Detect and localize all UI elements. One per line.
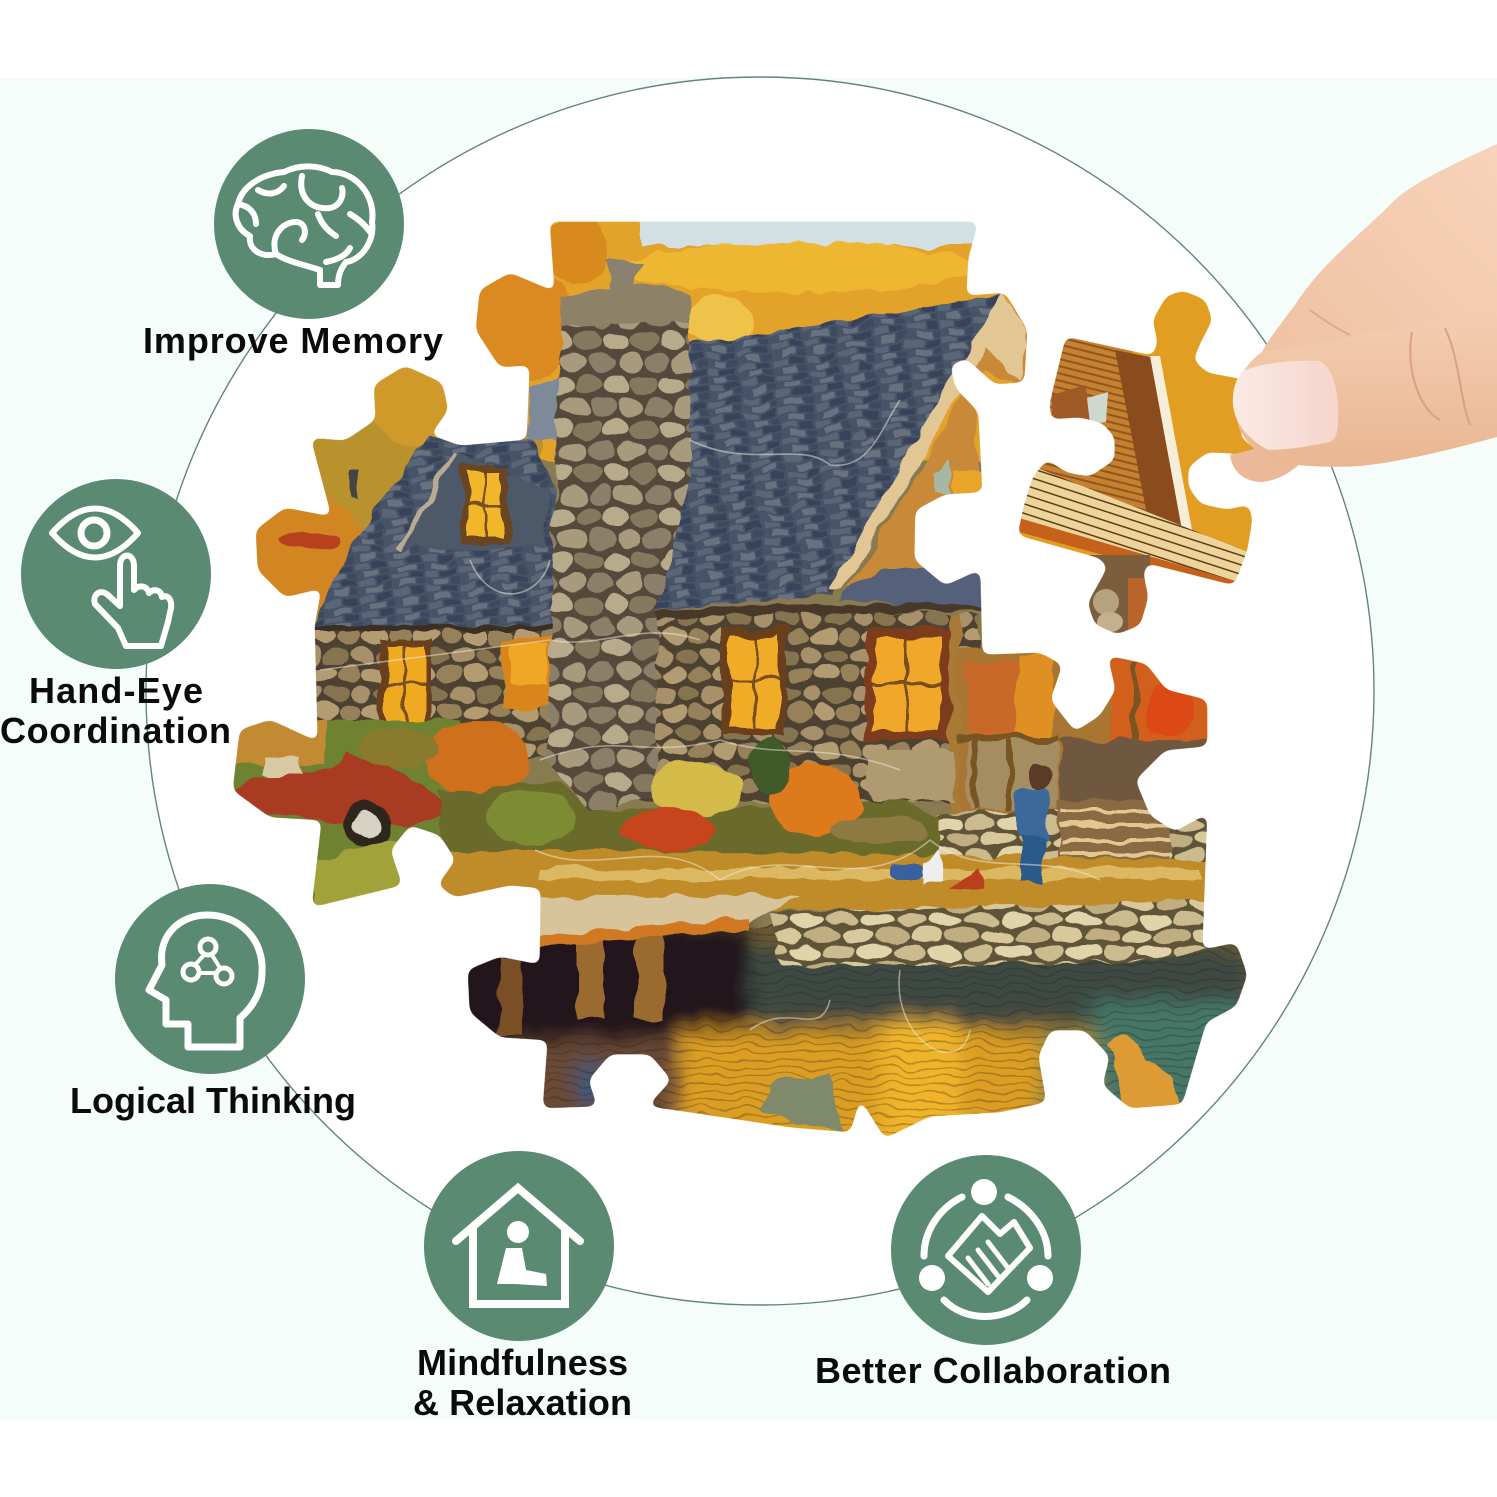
label: Improve Memory bbox=[143, 320, 443, 361]
index finger bbox=[1262, 144, 1497, 400]
ground bbox=[430, 850, 1220, 910]
icon: house with person bbox=[456, 1188, 580, 1304]
label: Logical Thinking bbox=[70, 1080, 356, 1121]
piece timber post bbox=[1115, 350, 1182, 526]
piece window detail bbox=[1052, 385, 1108, 424]
icon: brain bbox=[236, 166, 373, 285]
garden bushes bbox=[360, 722, 940, 860]
left wall bbox=[300, 628, 560, 758]
badge bbox=[21, 479, 211, 669]
label: Hand-Eye bbox=[29, 670, 203, 711]
badge bbox=[214, 129, 404, 319]
stone wall bbox=[770, 900, 1215, 966]
car bbox=[225, 720, 460, 915]
piece stone tab bbox=[1088, 555, 1150, 633]
dog bbox=[1108, 1037, 1185, 1115]
dock bbox=[530, 896, 800, 940]
main puzzle artwork bbox=[233, 222, 1246, 1136]
hand bbox=[1230, 144, 1497, 482]
benefit: hand-eye coordination bbox=[0, 479, 231, 751]
icon: head with nodes bbox=[149, 915, 262, 1047]
label line two: & Relaxation bbox=[413, 1382, 632, 1423]
porch area bbox=[870, 650, 1220, 865]
loose puzzle piece bbox=[1019, 292, 1254, 633]
base fill bbox=[519, 458, 984, 928]
badge bbox=[424, 1151, 614, 1341]
person and pets bbox=[890, 764, 1051, 890]
crease bbox=[1310, 310, 1350, 335]
thumb bbox=[1235, 315, 1497, 467]
icon: eye and hand bbox=[52, 508, 171, 646]
piece plank bbox=[1020, 468, 1247, 581]
lower finger bbox=[1230, 445, 1300, 482]
left roof bbox=[314, 436, 557, 628]
knuckle creases bbox=[1410, 328, 1470, 425]
chair bbox=[760, 1072, 842, 1130]
label: Mindfulness bbox=[417, 1342, 628, 1383]
chimney bbox=[548, 262, 690, 812]
benefit: mindfulness bbox=[413, 1151, 632, 1423]
benefit: better collaboration bbox=[815, 1155, 1171, 1391]
badge bbox=[891, 1155, 1081, 1345]
icon: collaboration cycle bbox=[919, 1179, 1053, 1316]
left dormer bbox=[400, 450, 550, 548]
label line two: Coordination bbox=[0, 710, 231, 751]
right wall bbox=[640, 568, 985, 812]
label: Better Collaboration bbox=[815, 1350, 1171, 1391]
water bbox=[468, 920, 1246, 1136]
sky and treetops bbox=[374, 222, 1020, 462]
benefit: logical thinking bbox=[70, 884, 356, 1121]
large ring bbox=[146, 77, 1374, 1305]
benefit: improve memory bbox=[143, 129, 443, 361]
right roof bbox=[654, 294, 1001, 610]
piece wood wall bbox=[1039, 338, 1146, 512]
left foliage and tab bbox=[256, 368, 543, 624]
gable wood bbox=[830, 293, 1030, 600]
puzzle cut lines bbox=[320, 400, 1100, 1052]
thumbnail bbox=[1233, 361, 1338, 450]
piece golden base bbox=[1020, 292, 1254, 555]
badge bbox=[115, 884, 305, 1074]
